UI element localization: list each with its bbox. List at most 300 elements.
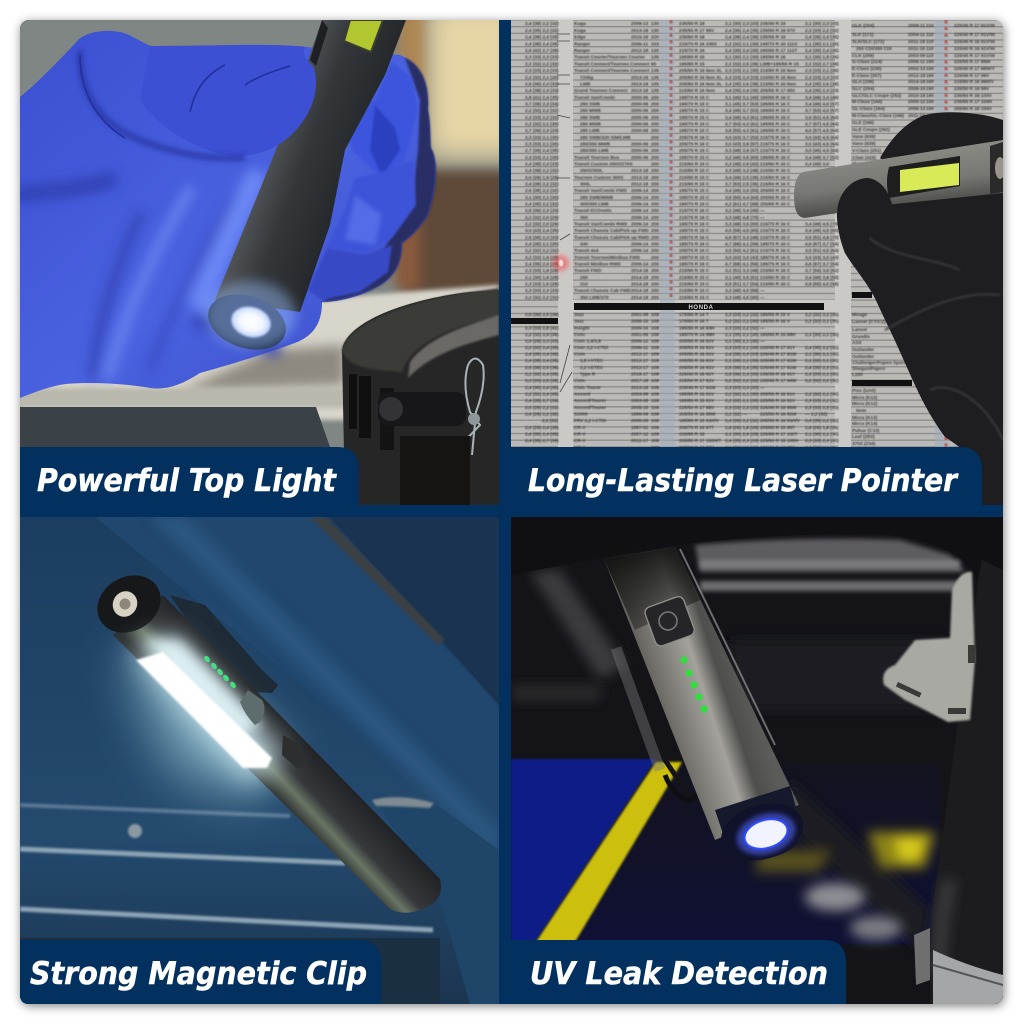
parts table text: 205/60 R 16 Non XL [679,82,722,86]
parts table text: 2002-09 [908,53,926,58]
parts table text: 2006-14 [631,248,649,253]
parts table text: 2,1 (30) 2,1 (30) [725,332,759,337]
caption: Long-Lasting Laser Pointer [499,447,982,505]
parts table text: 3,7 (53) 4,3 (61) [725,122,759,126]
parts table text: 2,4 (38) 2,4 (35) [525,42,559,46]
parts table text: 2006-14 [631,208,649,213]
parts table text: 2,4 (35) 2,2 (32) [805,418,839,423]
parts table text: 2009-15 [631,326,649,330]
parts table text: 195/70 R 15 C [679,188,710,193]
parts table text: 2,5 (36) 2,3 (33) [525,82,559,86]
parts table text: 2,4 (35) 2,2 (32) [725,418,759,423]
parts table text: 215/60 R 16 C [760,162,791,166]
parts table text: 2,1 (30) 2,1 (30) [725,358,759,363]
parts table text: 2013-18 [631,175,649,180]
parts table text: 2,3 (33) 2,2 (32) [805,28,839,33]
parts table text: 2,4 (38) 2,4 (35) [525,358,559,363]
parts table text: GL-Class (164) [852,106,885,111]
parts table text: 195/65 R 15 [679,62,705,66]
parts table text: 200 [651,262,659,266]
parts table text: 2,0 (29) 1,9 (28) [525,175,559,180]
parts table text: Accord/Tourer [574,405,606,410]
parts table text: 3,5 (51) 3,7 (54) [725,282,759,286]
parts table text: Transit Connect/Tourneo Connect [574,62,650,66]
parts table text: 290 [580,275,588,280]
parts table text: 2,2 (32) 2,2 (32) [525,108,559,113]
parts table text: 2,4 (35) 2,3 (33) [805,365,839,370]
parts table text: 215/60 R 16 Non [760,75,796,80]
parts table text: 3,8 (55) 4,4 (64) [725,195,759,200]
parts table text: 225/45 R 17 99V [954,73,990,78]
parts table text: 175/65 R 15 T [679,318,709,324]
parts table text: 195/65 R 16 C [760,122,791,126]
parts table text: 3,0 (43) 3,7 (53) [725,135,759,140]
parts table text: 2,4 (35) 2,0 (29) [525,262,559,266]
parts table text: 2,4 (35) 2,2 (32) [805,345,839,350]
parts table text: Lancer (CY/CZ) [852,319,886,324]
parts table text: G-Class (214) [852,59,882,64]
parts table text: 200 [651,108,659,113]
parts table text: 3,4 (49) 4,3 (61) [725,115,759,120]
parts table text: Transit Van/Combi [574,95,615,100]
parts table text: 205/75 R 16 C [679,148,710,153]
parts table text: 2006-14 [631,215,649,220]
parts table text: 2,4 (35) 2,7 (39) [525,398,559,403]
parts table text: 2013-18 [631,75,649,80]
parts table text: M-Class (164) [852,99,883,104]
parts table text: 2008-11 [908,23,925,28]
parts table text: 215/60 R 16 Non [679,88,715,93]
parts table text: 2,4 (35) 2,7 (39) [525,438,559,443]
parts table text: 3,1 (45) 3,1 (45) [725,95,759,100]
parts table text: 108 [651,385,659,390]
parts table text: 205/45 R 17 88Y [760,445,796,450]
parts table text: Pulsar (C13) [852,428,880,433]
glove: dark finger edges [308,58,436,302]
parts table text: 205/55 R 16 89W [679,412,716,416]
UV head and lens [715,786,803,860]
parts table text: 200 [651,275,659,280]
parts table text: 3,4 (49) 3,8 (55) [805,275,839,280]
parts table text: 2006-13 [908,106,926,111]
parts table text: — [760,208,765,213]
parts table text: GLC/GLC Coupe (253) [852,93,902,98]
parts table text: 200 [651,235,659,240]
parts table text: 2006-11 [631,42,648,46]
parts table text: 205/65 R 15 95T [760,425,795,430]
parts table text: 2000-06 [631,115,649,120]
parts table text: 215/70 R 16 [679,48,705,53]
parts table text: 2,3 (33) 2,3 (33) [805,438,839,443]
parts table text: 265/65 R 17 112T [760,48,797,53]
parts table text: 135 [651,88,659,93]
parts table text: 2006-14 [631,222,649,226]
parts table text: 235/60 R 18 103V [954,93,993,98]
parts table text: 195/70 R 15 C [679,228,710,233]
parts table text: 135 [651,82,659,86]
parts table text: 200 [651,148,659,153]
thumb and fingers over flashlight [140,45,316,156]
parts table text: 2,3 (33) 2,1 (30) [725,345,759,350]
parts table text: 205/60 R 16 Non XL [679,68,722,73]
parts table text: 225/45 R 18 95W [760,405,797,410]
metal bracket [883,572,975,722]
parts table text: 225/45 R 17 91W [760,352,797,356]
parts table text: SLK (171) [852,32,874,37]
parts table text: 215/75 R 16 C [760,148,791,153]
parts table text: 350 LWB/370 [580,295,609,300]
parts table text: Jazz [574,318,585,324]
parts table text: 2,0 (29) 2,2 (32) [525,405,559,410]
parts table text: SLK/SLC (172) [852,39,885,44]
parts table text: 2,1 (30) 2,3 (33) [725,21,759,26]
parts table text: Accord [574,392,590,396]
parts table text: Transit Connect/Tourneo Connect [574,68,650,73]
parts table text: 110 [926,53,934,58]
parts table text: 3,7 (57) 4,5 (64) [805,122,839,126]
flashlight body [113,595,441,913]
parts table text: 225/55 R 16 91V [760,398,796,403]
parts table text: 215/65 R 15 C [679,175,710,180]
parts table text: 2,2 (32) 2,1 (30) [805,392,839,396]
parts table text: 2,3 (33) 2,1 (30) [805,68,839,73]
parts table text: 195/60 R 16 [760,54,786,60]
parts table text: S2000 [574,412,588,416]
parts table text: 2,2 (32) — [725,412,747,416]
parts table text: 3,0 (46) 4,5 (64) [805,148,839,153]
parts table text: — [760,326,765,330]
parts table text: 190 [926,86,934,91]
parts table text: 2003-08 [631,392,649,396]
parts table text: 2,4 (35) 2,4 (35) [725,48,759,53]
parts table text: 2006-14 [631,202,649,206]
parts table text: 3,7 (39) 2,3 (34) [525,102,559,106]
parts table text: 2,3 (33) 2,3 (33) [725,405,759,410]
parts table text: 215/75 R 16 C [760,135,791,140]
parts table text: 200 [651,248,659,253]
parts table text: Mirage [852,312,868,317]
caption: Long-Lasting Laser Pointer: Long-Lasting Laser Pointer [528,463,959,499]
parts table text: Civic Tourer [574,385,601,390]
parts table text: 2,2 (32) 2,4 (35) [525,345,559,350]
parts table text: 2,3 (33) 2,1 (30) [525,155,559,160]
parts table text: 200 [651,135,659,140]
parts table text: 2,4 (35) 2,3 (33) [805,88,839,93]
parts table text: 2,2 (32) 2,1 (30) [525,122,559,126]
parts table text: 2,7 (39) 2,4 (35) [525,148,559,153]
parts table text: 200 [651,188,659,193]
parts table text: 195/70 R 15 C [679,255,710,260]
parts table text: Pixo (UA0) [852,388,876,393]
parts table text: 200 [651,115,659,120]
parts table text: Challenger/Pajero Sport [852,360,906,365]
parts table text: 3,1 (30) 2,1 (30) [525,195,559,200]
parts table text: 2011-16 [908,46,925,51]
parts table text: Tourneo Custom 300S [574,175,623,180]
parts table text: 2,2 (32) 2,0 (29) [525,215,559,220]
parts table text: 280/350 LWB [580,148,609,153]
parts table text: 2012-18 [908,73,926,78]
parts table text: 2,0 (29) 2,2 (32) [525,412,559,416]
parts table text: 215/75 R 16 C [760,235,791,240]
parts table text: 2006-14 [631,242,649,246]
parts table text: 225/45 R 17 91W [679,385,716,390]
parts table text: 235/60 R 18 [679,34,705,40]
parts table text: 195/75 R 16 C [760,262,791,266]
parts table text: Transit Tourneo Bus [574,155,620,160]
parts table text: 4,0 (57) 4,5 (64) [805,128,839,133]
parts table text: 190 [926,106,934,111]
parts table text: 2005-09 [631,418,649,423]
parts table text: 195/70 R 15 C [679,195,710,200]
parts table text: E-Class (207) [852,73,882,78]
parts table text: 205/55 R 16 91V [679,345,715,350]
parts table text: 2004-11 [908,32,925,37]
parts table text: 215/65 R 15 C [679,162,710,166]
parts table text: 108 [651,338,659,344]
body glass highlight edge [680,549,775,745]
parts table text: 200 [651,175,659,180]
parts table text: FRV 2,2 i-CTDi [574,418,606,423]
parts table text: 2012-17 [631,438,649,443]
parts table text: 2,1 (30) 2,0 (29) [725,445,759,450]
parts table text: 195/65 R 15 [679,54,705,60]
parts table text: 3,4 (49) 3,7 (53) [805,155,839,160]
parts table text: 3,7 (53) 4,0 (57) [805,108,839,113]
parts table text: Note [856,408,867,413]
parts table text: 108 [651,358,659,363]
parts table text: 2005-12 [908,99,926,104]
parts table text: 225/40 R 17 88W/Y [954,66,996,71]
parts table text: 235/55 R 17 99V [679,28,715,33]
parts table text: 2,3 (33) 2,2 (32) [525,115,559,120]
parts table text: 2000-06 [631,142,649,146]
parts table text: 200 [651,142,659,146]
parts table text: 190 [926,79,934,84]
parts table text: 185/75 R 16 C [760,255,791,260]
parts table text: 200 [651,242,659,246]
parts table text: 195/65 R 16 C [760,108,791,113]
parts table text: 2008-15 [908,86,926,91]
parts table text: Transit Van/Combi FWD [574,188,627,193]
parts table text: Ranger [574,48,590,53]
parts table text: 185/65 R 15 88H [760,332,796,337]
parts table text: 205/70 R 15 97T [679,425,714,430]
parts table text: 110 [926,23,934,28]
parts table text: 3,7 (53) 2,5 (36) [725,182,759,186]
parts table text: 215/60 R 16 C [760,268,791,273]
parts table text: 205/55 R 17 95V [760,88,796,93]
parts table text: 185/55 R 15 V [760,312,791,317]
parts table text: 235/50 R 19 99V [954,86,990,91]
flashlight body [215,20,406,312]
parts table text: 3,4 (49) 2,5 (36) [725,175,759,180]
parts table text: 215/65 R 15 C [679,288,710,293]
parts table text: 300/300 LWB [580,202,609,206]
parts table text: 108 [651,318,659,324]
parts table text: 108 [651,445,659,450]
parts table text: 215/75 R 16 C [760,248,791,253]
parts table text: Outlander [852,354,874,359]
parts table text: 205/55 R 16 91H/V [760,418,801,423]
parts table text: 3,2 (46) 3,4 (49) [725,208,759,213]
parts table text: 200 [651,208,659,213]
parts table text: 200 [651,95,659,100]
parts table text: 2,2 (32) 2,1 (30) [725,42,759,46]
parts table text: 2012-17 [631,365,649,370]
parts table text: GLC (204) [852,86,875,91]
parts table text: 215/60 R 16 96H/V [954,79,995,84]
parts table text: 260 SWB [580,102,601,106]
parts table text: 205/55 R 16 91V [679,352,715,356]
glove: palm folds [20,180,275,375]
parts table text: 2,1 (30) 2,1 (30) [725,54,759,60]
parts table text: Edge [574,34,586,40]
parts table text: Micra (K12) [852,395,878,400]
parts table text: 3,4 (49) 3,5 (50) [725,188,759,193]
parts table text: 200 [651,288,659,293]
parts table text: 200 [651,228,659,233]
clip behind flashlight [170,595,278,693]
parts table text: 2,5 (36) 2,5 (36) [525,312,559,317]
parts table text: — [760,288,765,293]
parts table text: 2008-13 [631,21,649,26]
parts table text: 2015-18 [908,93,926,98]
parts table text: Viano (639) [852,161,877,166]
parts table text: Transit 4x4 [574,248,599,253]
parts table sheet: HONDA [688,305,714,311]
parts table text: 195/70 R 15 C [679,155,710,160]
parts table text: 280 SWB/MWB [580,195,614,200]
parts table text: 3,2 (46) 3,5 (50) [725,155,759,160]
parts table text: 108 [651,432,659,436]
parts table text: Transit Chassis Cab/Pick up FWD [574,228,649,233]
parts table text: Shogun/Pajero [852,366,885,371]
parts table text: 2,4 (35) 2,4 (35) [725,88,759,93]
parts table text: 2,3 (33) 2,5 (36) [525,378,559,383]
parts table text: 130 [651,28,659,33]
hand: blue nitrile glove [20,31,436,398]
parts table text: 225/50 R 17 98V [679,405,715,410]
parts table text: 135 [651,75,659,80]
parts table text: 108 [651,332,659,337]
flashlight in hand [794,140,1005,218]
parts table text: 190 [926,66,934,71]
parts table text: 2012-18 [631,48,649,53]
parts table text: 225/45 R 17 91Y [760,345,796,350]
parts table text: 2,3 (33) 2,3 (33) [805,405,839,410]
parts table text: Transit Custom 250S/270S [574,162,633,166]
parts table text: 200 [651,128,659,133]
parts table text: 2,4 (35) 2,2 (32) [525,28,559,33]
parts table text: 2,3 (33) 2,3 (33) [525,288,559,293]
parts table text: 2015-17 [631,372,649,376]
parts table text: 2006-11 [908,59,925,64]
parts table text: 2,1 (30) 2,1 (30) [805,332,839,337]
parts table text: 215/75 R 16 C [679,208,710,213]
parts table text: 2,4 (38) 2,4 (35) [725,34,759,40]
parts table text: 225/40 R 18 92Y [679,372,715,376]
parts table text: 110 [926,46,934,51]
parts table text: 3,4 (49) 3,0 [805,162,829,166]
parts table text: Type R [580,372,596,376]
parts table text: 215/65 R 15 C [679,275,710,280]
flashlight body [604,547,799,840]
panel: strong magnetic clip [20,517,499,1004]
parts table text: 205/55 R 16 91V [679,338,715,344]
parts table text: 2006-14 [631,195,649,200]
parts table text: 215/75 R 16 C [760,222,791,226]
parts table text: 2,3 (33) 2,3 (33) [725,75,759,80]
parts table text: 200 [651,268,659,273]
parts table text: 200 [651,162,659,166]
right hose and clamp [914,560,1003,1004]
parts table text: 2008-15 [631,405,649,410]
parts table text: 205/75 R 16 C [679,142,710,146]
caption: Powerful Top Light [20,447,359,505]
parts table text: 215/50 R 17 91V [679,378,715,383]
parts table text: 190 [926,59,934,64]
panel: UV leak detection [511,517,1003,1004]
parts table text: 2014-18 [631,288,649,293]
parts table text: 2,1 (30) 1,9 (28) [525,275,559,280]
parts table text: 2,2 (32) 2,1 (30) [805,318,839,324]
parts table text: 2,5 (36) 2,3 (33) [725,372,759,376]
parts table text: 205/55 R 16 91V [679,358,715,363]
parts table text: E-Class (230) [852,66,882,71]
parts table text: 103 [651,42,659,46]
parts table text: 200 [651,222,659,226]
parts table text: 185/55 R 16 83H [679,326,715,330]
parts table text: 2,1 (30) 2,1 (30) [805,358,839,363]
parts table text: Micra (K14) [852,421,878,426]
parts table text: 2,4 (38) 2,3 (33) [525,162,559,166]
parts table text: 195/65 R 16 C [760,128,791,133]
parts table text: LWB [580,82,591,86]
parts table text: 370Z (Z34) [852,441,876,446]
parts table text: 130 [651,21,659,26]
parts table text: 108 [651,392,659,396]
pocket clip [611,646,698,802]
parts table text: Vano (639) [852,134,876,139]
parts table text: 2,4 (38) 2,3 (33) [525,88,559,93]
parts table text: 2,1 (30) 2,1 (30) [805,42,839,46]
parts table text: 2001-06 [631,332,649,337]
parts table text: 2,4 (35) 2,4 (35) [525,352,559,356]
parts table text: 280 MWB [580,122,601,126]
parts table text: 2,9 (42) 2,7 (39) [525,48,559,53]
parts table text: 2008-15 [631,318,649,324]
parts table text: 108 [651,438,659,443]
parts table text: 200 [651,182,659,186]
parts table text: 2,1 (30) 2,1 (30) [725,338,759,344]
parts table text: 195/70 R 15 C [679,108,710,113]
parts table text: 2015-18 [631,34,649,40]
caption: UV Leak Detection [499,940,846,1004]
parts table text: 1999-09 [631,412,649,416]
parts table text: Kuga [574,21,586,26]
parts table text: 190 [926,99,934,104]
upper hose [524,534,964,572]
parts table text: 2,5 (36) 2,4 (35) [725,365,759,370]
parts table text: 200 [651,195,659,200]
parts table text: 235/45 R 17 94W [760,378,797,383]
parts table text: 235/55 R 19 [760,34,786,40]
parts table text: 2,4 (38) 2,4 (35) [525,34,559,40]
parts table text: 110 [926,39,934,44]
parts table text: 2,2 (32) 2,1 (30) [725,398,759,403]
parts table text: 225/65 R 17 102H/T [679,438,721,443]
